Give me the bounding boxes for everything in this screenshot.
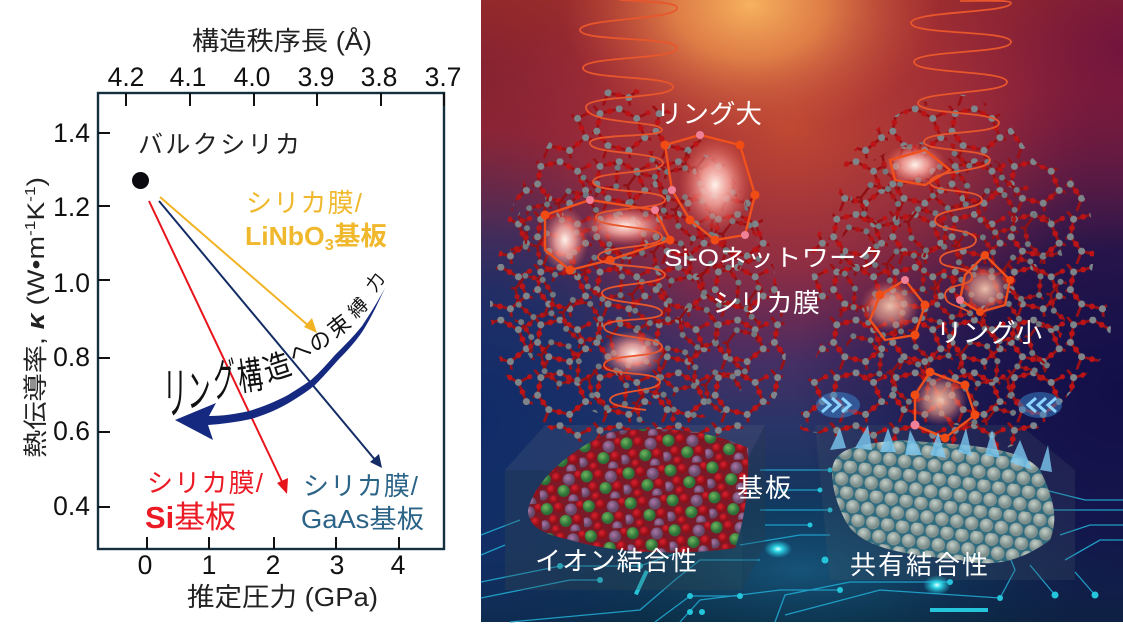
substrate box: covalent	[815, 425, 1075, 580]
phonon wave: right helix	[911, 1, 1011, 313]
left axis tick labels: 1.2	[53, 192, 90, 222]
top axis title: 構造秩序長 (Å)	[192, 26, 372, 56]
arrow: silica film on LiNbO3	[160, 197, 317, 333]
rotated text: constraint on ring structure: リ	[163, 364, 187, 427]
data point: bulk silica	[132, 172, 149, 189]
top axis tick labels: 3.8	[361, 62, 397, 92]
silica network: right cluster	[800, 95, 1111, 453]
chart frame with axis ticks	[98, 93, 444, 549]
label: silica film on LiNbO3 substrate	[245, 188, 387, 254]
rotated text: constraint on ring structure: グ	[214, 355, 234, 406]
left axis title: K	[23, 201, 50, 221]
top axis tick labels: 4.1	[170, 62, 206, 92]
left axis title: -1	[22, 221, 39, 236]
rotated text: constraint on ring structure: 束	[323, 310, 355, 343]
label: Si-O network: Si-Oネットワーク	[664, 245, 884, 272]
left axis tick labels: 0.6	[53, 416, 90, 446]
label: silica film on GaAs substrate: GaAs基板	[301, 504, 424, 534]
label: substrate: 基板	[737, 473, 791, 503]
top axis tick labels	[108, 62, 461, 92]
interface energy flow: blue spikes	[830, 425, 1052, 472]
bottom axis tick labels: 1	[202, 550, 216, 580]
label: bulk silica: バルクシリカ	[138, 131, 300, 159]
rotated text: constraint on ring structure: 構	[235, 354, 265, 399]
panel: thermal conductivity chart	[0, 0, 480, 628]
bottom axis title: 推定圧力 (GPa)	[187, 582, 378, 612]
top axis tick labels: 4.0	[234, 62, 270, 92]
bottom axis tick labels: 3	[330, 550, 344, 580]
left axis title: )	[23, 177, 50, 186]
label: silica film: シリカ膜	[712, 288, 820, 318]
label: silica film on Si substrate: シリカ膜/	[147, 468, 264, 498]
circuit board nodes	[557, 468, 1098, 615]
phonon wave: left helix	[580, 0, 677, 410]
label: large ring: リング大	[656, 99, 762, 129]
ionic substrate atoms	[528, 429, 748, 553]
label: silica film on Si substrate: Si基板	[145, 500, 236, 535]
circuit board traces	[481, 470, 1123, 622]
left axis tick labels: 0.4	[53, 491, 90, 521]
arrow: ring structure constraint curve	[175, 288, 385, 440]
label: silica film on GaAs substrate	[301, 471, 424, 534]
glowing rings: small rings	[860, 143, 1014, 442]
covalent substrate atoms	[832, 440, 1054, 563]
top axis tick labels: 4.2	[108, 62, 144, 92]
left axis title: 熱伝導率, κ (W•m	[23, 246, 50, 458]
label: covalent bonding: 共有結合性	[850, 550, 988, 580]
substrate box: ionic	[505, 425, 765, 590]
left axis title: -1	[22, 186, 39, 202]
arrow: silica film on Si	[149, 201, 288, 494]
label: silica film on GaAs substrate: シリカ膜/	[303, 471, 419, 501]
silica network: left cluster	[490, 85, 786, 445]
left axis tick labels	[53, 118, 90, 521]
left axis tick labels: 1.4	[53, 118, 90, 148]
glowing rings: large rings	[540, 131, 760, 378]
label: ionic bonding: イオン結合性	[535, 546, 697, 576]
rotated text: constraint on ring structure: ン	[188, 365, 210, 417]
rotated text: constraint on ring structure: 力	[362, 269, 389, 295]
rotated text: constraint on ring structure: へ	[285, 336, 316, 368]
left axis tick labels: 0.8	[53, 342, 90, 372]
panel: molecular illustration	[481, 0, 1123, 622]
chevrons: energy flow from the left	[816, 392, 860, 418]
rotated text: constraint on ring structure	[163, 269, 389, 427]
bottom axis tick labels	[138, 550, 405, 580]
bottom axis tick labels: 4	[391, 550, 405, 580]
label: silica film on LiNbO3 substrate: シリカ膜/	[246, 188, 363, 218]
label: silica film on LiNbO3 substrate: 3	[325, 237, 334, 254]
label: small ring: リング小	[936, 318, 1042, 348]
left axis tick labels: 1.0	[53, 268, 90, 298]
label: silica film on Si substrate	[145, 468, 264, 535]
label: silica film on LiNbO3 substrate: LiNbO	[245, 221, 323, 251]
rotated text: constraint on ring structure: 造	[259, 347, 295, 389]
top axis tick labels: 3.7	[425, 62, 461, 92]
bottom axis tick labels: 2	[266, 550, 280, 580]
label: silica film on LiNbO3 substrate: 基板	[334, 221, 387, 251]
top axis tick labels: 3.9	[298, 62, 334, 92]
rotated text: constraint on ring structure: 縛	[344, 294, 373, 323]
chevrons: energy flow from the right	[1018, 392, 1062, 418]
arrow: silica film on GaAs	[159, 201, 382, 468]
bottom axis tick labels: 0	[138, 550, 152, 580]
rotated text: constraint on ring structure: の	[304, 325, 336, 358]
